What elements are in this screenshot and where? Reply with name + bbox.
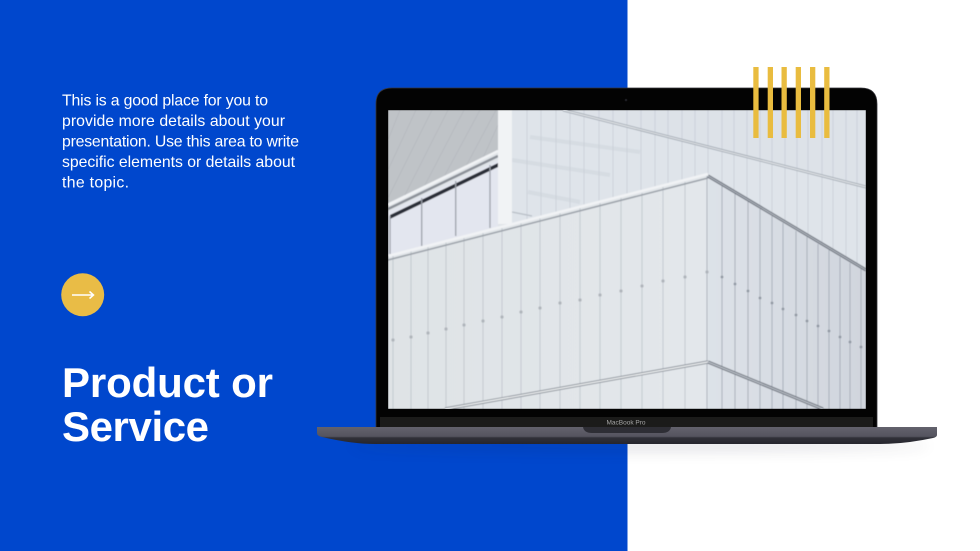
text block: description: provide more details about your: [62, 113, 285, 130]
text block: description: specific elements or details about: [62, 154, 296, 171]
panel: blue background: [0, 0, 628, 551]
heading: Product or Service: [62, 359, 273, 450]
text block: description: the topic.: [62, 174, 129, 192]
main ridge: [388, 174, 866, 270]
decorative yellow bars: [753, 67, 830, 138]
laptop mockup: [317, 88, 937, 451]
heading: Product or Service: Service: [62, 403, 209, 450]
base: [317, 427, 937, 444]
windows: [388, 160, 498, 258]
text block: description: [62, 92, 299, 192]
lower right wall: [769, 216, 866, 409]
lower left wall: [388, 176, 708, 409]
icon: arrow button: [61, 273, 104, 316]
roof: [388, 110, 498, 203]
laptop lid and bezel: [376, 88, 877, 428]
label: MacBook Pro: MacBook Pro: [606, 420, 646, 426]
panel seams: [393, 182, 685, 409]
screen photo: building: [388, 110, 866, 409]
trackpad notch: [583, 427, 671, 433]
upper wall: [512, 110, 866, 270]
rivets: [391, 270, 709, 342]
lower ridge: [445, 362, 823, 409]
text block: description: presentation. Use this area to write: [62, 134, 299, 150]
white column: [498, 110, 512, 224]
upper diagonal line: [563, 110, 866, 187]
heading: Product or Service: Product or: [62, 359, 273, 406]
text block: description: This is a good place for you to: [62, 92, 268, 110]
